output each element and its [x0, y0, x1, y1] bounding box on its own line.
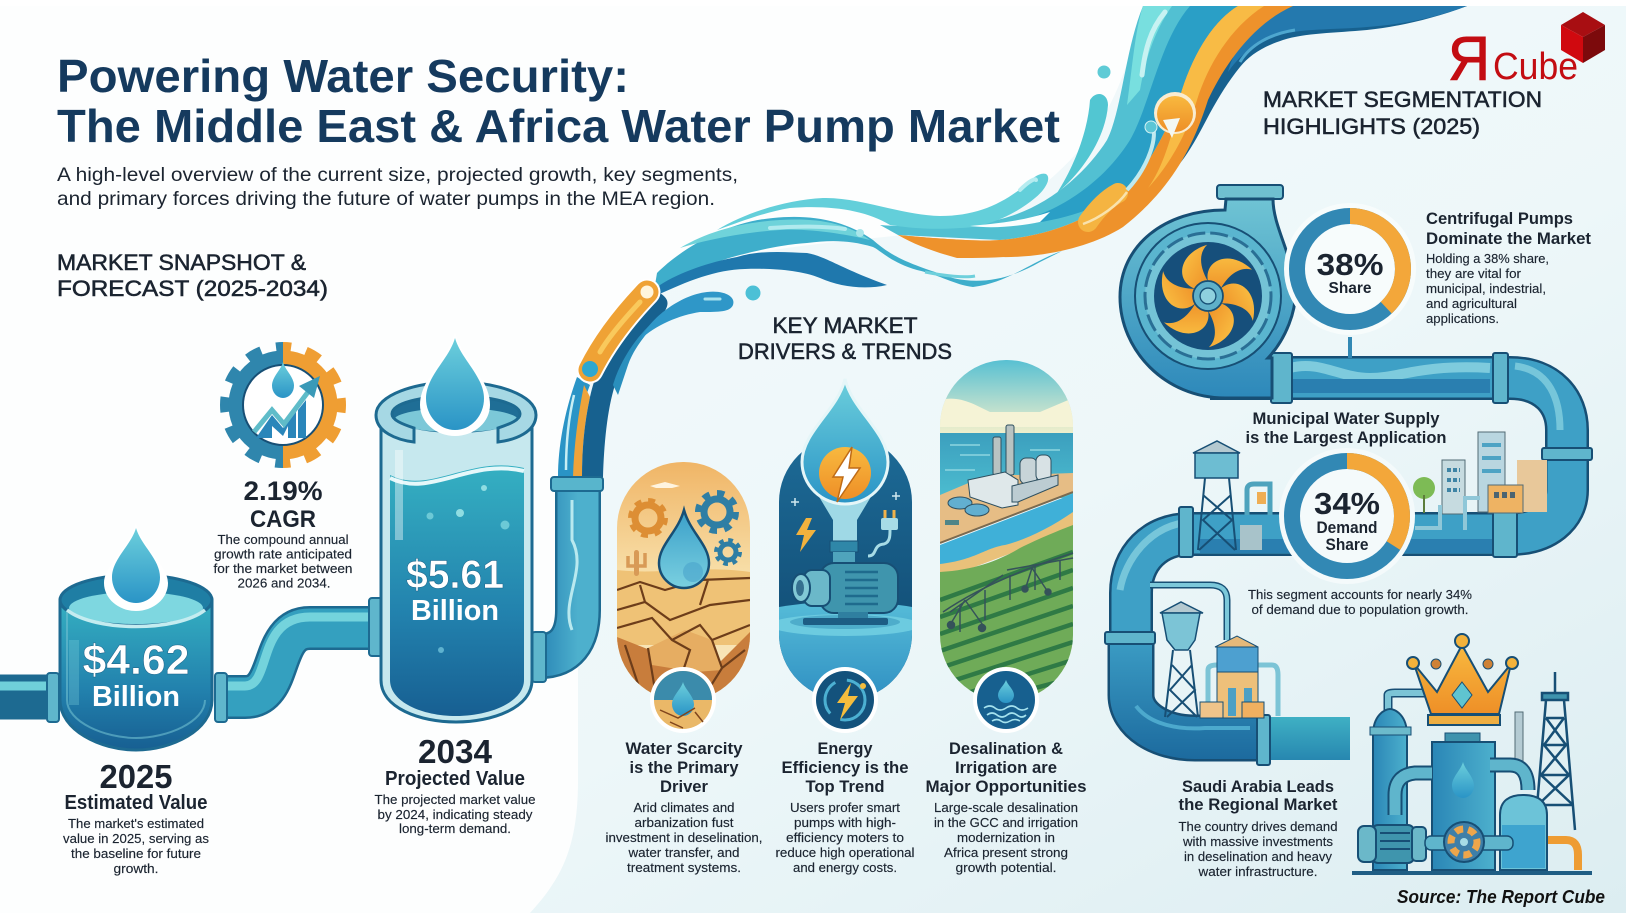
swoosh: cyan stream	[880, 6, 1238, 240]
heading: market snapshot	[57, 250, 328, 301]
icon: pump motor	[791, 490, 900, 625]
text: water scarcity: Driver	[660, 777, 708, 796]
text: desalination and irrigation: Major Opportunities	[926, 777, 1086, 796]
text: 2025 estimated value: value in 2025, serving as	[63, 831, 209, 846]
heading: market segmentation: HIGHLIGHTS (2025)	[1263, 114, 1480, 139]
text: 2034 projected value: The projected market value	[374, 792, 536, 807]
pipe network right	[1105, 353, 1592, 765]
text: CAGR	[214, 476, 352, 590]
icon: CAGR gear	[225, 347, 341, 463]
tank value: Billion	[92, 681, 180, 713]
text: 2034 projected value: 2034	[418, 733, 493, 770]
text: water scarcity: water transfer, and	[627, 845, 740, 860]
icon: gears	[631, 493, 740, 564]
text: CAGR: 2.19%	[244, 476, 322, 506]
text: 2034 projected value: Projected Value	[385, 768, 525, 790]
donut chart: 34% demand share	[1279, 448, 1415, 584]
title: The Middle East & Africa Water Pump Market	[57, 100, 1060, 152]
derrick	[1535, 672, 1575, 830]
text: centrifugal pumps: applications.	[1426, 311, 1499, 326]
heading: key market drivers: KEY MARKET	[772, 313, 918, 338]
text: desalination and irrigation: Irrigation are	[955, 758, 1057, 777]
text: energy efficiency: pumps with high-	[794, 815, 896, 830]
heading: market snapshot: FORECAST (2025-2034)	[57, 276, 328, 301]
title	[57, 50, 1060, 152]
water swoosh ribbon	[558, 6, 1467, 477]
column and pipes	[1370, 693, 1547, 870]
text: 2025 estimated value: the baseline for future	[71, 846, 201, 861]
text: municipal water supply: is the Largest Application	[1246, 428, 1446, 447]
text: saudi arabia: with massive investments	[1182, 834, 1333, 849]
icon: irrigation pivot	[943, 553, 1073, 632]
heading: market snapshot: MARKET SNAPSHOT &	[57, 250, 306, 275]
text: water scarcity: Water Scarcity	[626, 739, 743, 758]
tank value: Billion	[411, 595, 499, 627]
icon: crown and industrial plant	[1352, 634, 1592, 873]
text: centrifugal pumps	[1426, 209, 1591, 326]
icon: desalination plant	[945, 425, 1058, 525]
swoosh: upper wave	[717, 174, 1048, 230]
text: water scarcity: Arid climates and	[634, 800, 734, 815]
text: CAGR: CAGR	[250, 506, 316, 533]
vessel	[1432, 712, 1523, 870]
text: 2034 projected value: by 2024, indicating steady	[378, 807, 533, 822]
text: saudi arabia: The country drives demand	[1178, 819, 1338, 834]
subtitle: A high-level overview of the current size, projected growth, key segments,	[57, 164, 738, 186]
text: 2034 projected value: long-term demand.	[399, 821, 511, 836]
text: CAGR: for the market between	[214, 561, 352, 576]
heading: market segmentation: MARKET SEGMENTATION	[1263, 87, 1542, 112]
heading: key market drivers: DRIVERS & TRENDS	[738, 339, 952, 364]
text: 2025 estimated value: growth.	[114, 861, 158, 876]
icon: water scarcity badge	[654, 671, 712, 729]
text: desalination and irrigation: in the GCC and irrigation	[934, 815, 1078, 830]
subtitle	[57, 164, 738, 210]
text: water scarcity: investment in deselination,	[606, 830, 762, 845]
pipe flanges	[1105, 353, 1592, 765]
text: CAGR: growth rate anticipated	[214, 546, 352, 562]
text: energy efficiency: efficiency moters to	[786, 830, 904, 845]
text: saudi arabia	[1178, 777, 1338, 879]
text: desalination and irrigation: Desalination &	[949, 739, 1063, 758]
text: municipal description	[1248, 587, 1472, 617]
text: centrifugal pumps: and agricultural	[1426, 296, 1517, 311]
text: CAGR: The compound annual	[218, 532, 349, 547]
arc into pipe	[558, 286, 733, 477]
text: municipal water supply	[1246, 409, 1446, 447]
donut chart: 38% share: 38%	[1316, 247, 1384, 282]
text: energy efficiency: reduce high operational	[776, 845, 915, 860]
donut chart: 34% demand share: Share	[1326, 535, 1368, 554]
text: desalination and irrigation: growth potential.	[956, 860, 1056, 875]
text: saudi arabia: water infrastructure.	[1197, 864, 1318, 879]
text: water scarcity: is the Primary	[630, 758, 739, 777]
text: centrifugal pumps: Holding a 38% share,	[1426, 251, 1549, 266]
motor and impeller	[1358, 822, 1513, 863]
text: 2034 projected value	[374, 733, 536, 836]
source note: Source: The Report Cube	[1397, 887, 1605, 907]
text: 2025 estimated value: The market's estimated	[68, 816, 204, 831]
logo: RCube	[1448, 12, 1605, 94]
text: saudi arabia: in deselination and heavy	[1184, 849, 1332, 864]
tank value	[82, 636, 190, 713]
donut chart: 34% demand share: Demand	[1316, 518, 1378, 537]
text: water scarcity	[606, 739, 762, 875]
swoosh: middle ribbon	[653, 212, 1062, 297]
icon: drop over big tank	[420, 332, 490, 436]
text: centrifugal pumps: they are vital for	[1426, 266, 1522, 281]
heading: key market drivers	[738, 313, 952, 364]
donut chart: 34% demand share: 34%	[1314, 486, 1380, 521]
text: energy efficiency: Energy	[818, 739, 873, 758]
icon: drop	[659, 510, 709, 588]
donut chart: 38% share	[1284, 203, 1416, 358]
text: municipal description: This segment accounts for nearly 34%	[1248, 587, 1472, 602]
text: energy efficiency: Top Trend	[806, 777, 884, 796]
text: CAGR: 2026 and 2034.	[238, 576, 330, 590]
text: municipal description: of demand due to population growth.	[1252, 602, 1468, 617]
panel: desalination and irrigation	[940, 360, 1073, 733]
title: Powering Water Security:	[57, 50, 629, 102]
swoosh: droplets	[746, 66, 1110, 300]
text: desalination and irrigation	[926, 739, 1086, 875]
icon: centrifugal pump	[1120, 185, 1295, 398]
icon: water wave badge	[977, 671, 1035, 729]
text: saudi arabia: the Regional Market	[1178, 795, 1338, 814]
heading: market segmentation	[1263, 87, 1542, 139]
text: water scarcity: arbanization fust	[634, 815, 734, 830]
text: energy efficiency: Users profer smart	[790, 800, 900, 815]
logo: RCube: Я	[1448, 25, 1490, 94]
swoosh: dark lower tail	[653, 252, 887, 297]
tank: 2025	[47, 575, 227, 750]
text: centrifugal pumps: municipal, indestrial,	[1426, 281, 1546, 296]
subtitle: and primary forces driving the future of water pumps in the MEA region.	[57, 188, 715, 210]
icon: city skyline	[1413, 432, 1547, 530]
pipe network left	[0, 477, 603, 697]
panel: water scarcity	[617, 462, 750, 733]
tank value	[406, 553, 504, 627]
icon: water tower and plant	[1193, 441, 1270, 550]
icon: lower water tower and building	[1160, 602, 1278, 718]
text: 2025 estimated value: Estimated Value	[64, 792, 208, 814]
text: water scarcity: treatment systems.	[627, 860, 741, 875]
text: saudi arabia: Saudi Arabia Leads	[1182, 777, 1334, 796]
logo: RCube: Cube	[1493, 46, 1578, 88]
text: energy efficiency: and energy costs.	[793, 860, 897, 875]
tank: 2034	[369, 382, 546, 722]
text: energy efficiency: Efficiency is the	[782, 758, 908, 777]
text: 2025 estimated value: 2025	[100, 758, 172, 795]
impeller	[1154, 239, 1262, 353]
icon: energy badge	[816, 671, 874, 729]
text: desalination and irrigation: Large-scale desalination	[934, 800, 1078, 815]
swoosh: orange band	[898, 6, 1293, 257]
text: centrifugal pumps: Dominate the Market	[1426, 229, 1591, 248]
tank value: $5.61	[406, 553, 504, 597]
text: energy efficiency	[776, 739, 915, 875]
swoosh: orange knob	[1083, 92, 1196, 224]
text: desalination and irrigation: modernization in	[957, 830, 1055, 845]
panel: energy efficiency	[779, 379, 912, 733]
text: municipal water supply: Municipal Water Supply	[1252, 409, 1440, 428]
donut chart: 38% share: Share	[1328, 280, 1372, 297]
crown	[1407, 634, 1518, 725]
text: desalination and irrigation: Africa present strong	[944, 845, 1068, 860]
icon: drop over small tank	[104, 522, 168, 611]
text: 2025 estimated value	[63, 758, 209, 876]
icon: drop with lightning	[802, 379, 888, 504]
tank value: $4.62	[82, 636, 190, 683]
text: centrifugal pumps: Centrifugal Pumps	[1426, 209, 1573, 228]
swoosh: dark blue tail	[1150, 6, 1467, 182]
